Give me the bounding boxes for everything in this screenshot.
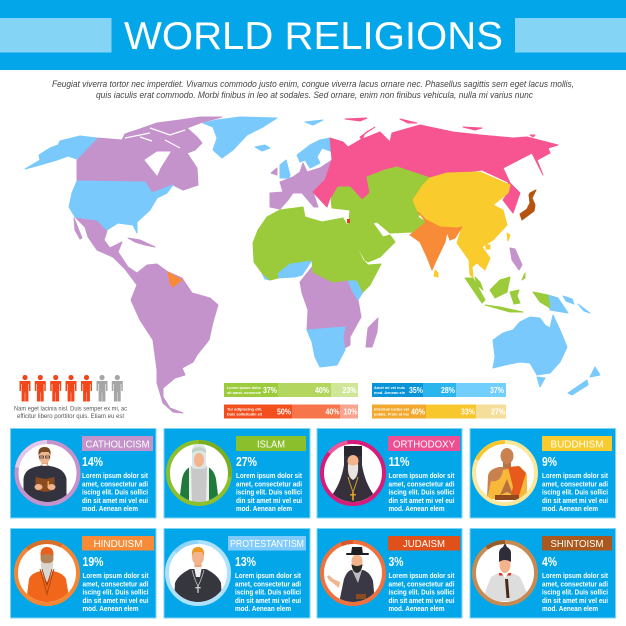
portrait: catholic priest (14, 440, 80, 506)
panel: shintoism (462, 528, 616, 618)
people pictogram (14, 375, 127, 420)
description: iscing elit. Duis sollici (388, 588, 454, 596)
description: mod. Aenean elem (236, 504, 292, 513)
header band (0, 0, 626, 70)
description: din sit amet mi vel eui (82, 496, 148, 505)
description: amet, consectetur adi (82, 580, 148, 588)
portrait: buddhist monk (472, 440, 538, 506)
portrait: imam (168, 442, 230, 504)
pictogram caption (14, 406, 127, 420)
description (388, 471, 455, 513)
description: Lorem ipsum dolor sit (82, 571, 149, 580)
label (542, 436, 612, 451)
stacked bar: yellow: 40% (411, 408, 425, 416)
stacked bar: yellow (372, 404, 506, 418)
description: amet, consectetur adi (388, 580, 454, 588)
stacked bar: blue: 35% (409, 386, 423, 395)
label: SHINTOISM (550, 538, 604, 550)
portrait: shinto priest (472, 540, 538, 606)
panel: islam (164, 428, 310, 518)
stacked bar: red (224, 404, 358, 418)
intro text: quis iaculis erat commodo. Morbi finibus in leo at sodales. Sed ornare, enim non finibus vehicula, nulla mi varius nunc (96, 90, 533, 100)
label: ORTHODOXY (393, 438, 455, 450)
region: orthodox pink (313, 118, 558, 213)
description: iscing elit. Duis sollici (542, 588, 608, 596)
stacked bar: green: 37% (263, 386, 277, 395)
region: hindu orange (168, 212, 462, 287)
portrait: orthodox priest (320, 440, 386, 506)
label: ISLAM (257, 438, 285, 450)
label (542, 536, 612, 550)
percentage: 3% (388, 554, 404, 569)
description: amet, consectetur adi (82, 480, 148, 488)
description: Lorem ipsum dolor sit (388, 571, 455, 580)
description (82, 571, 149, 613)
description: iscing elit. Duis sollici (235, 588, 301, 596)
pictogram caption: Nam eget lacinia nisl. Duis semper ex mi, ac (14, 406, 127, 412)
description: mod. Aenean elem (388, 604, 444, 613)
region: catholic purple (74, 117, 522, 413)
description: Lorem ipsum dolor sit (388, 471, 455, 480)
description: mod. Aenean elem (235, 604, 291, 613)
description (82, 471, 149, 513)
pictogram caption: efficitur libero porttitor quis. Etiam eu est (17, 414, 124, 420)
description: din sit amet mi vel eui (388, 596, 454, 605)
stacked bar: blue (372, 383, 506, 397)
region: israel (347, 219, 350, 223)
panel: hinduism (3, 528, 156, 618)
label: HINDUISM (94, 538, 142, 550)
portrait: rabbi (320, 540, 386, 606)
description: amet, consectetur adi (236, 480, 302, 488)
label: PROTESTANTISM (230, 538, 304, 550)
stacked bar: red: Duis sollicitudin sit (227, 412, 263, 416)
panel: buddhism (464, 428, 616, 518)
percentage: 4% (542, 554, 557, 569)
stacked bar: blue: mod. Aenean ele (374, 390, 406, 395)
stacked bar: red: 40% (326, 408, 340, 416)
description: din sit amet mi vel eui (82, 596, 148, 605)
intro text (52, 79, 574, 100)
description: Lorem ipsum dolor sit (82, 471, 149, 480)
percentage: 14% (82, 454, 103, 469)
percentage: 11% (388, 454, 410, 469)
description: iscing elit. Duis sollici (236, 488, 302, 496)
description: din sit amet mi vel eui (388, 496, 454, 505)
stacked bar: green: Lorem ipsum dolor (227, 385, 261, 390)
portrait: hindu sadhu (14, 540, 80, 606)
description: amet, consectetur adi (388, 480, 454, 488)
title: WORLD RELIGIONS (124, 15, 503, 58)
description: din sit amet mi vel eui (542, 496, 608, 505)
percentage: 27% (236, 454, 257, 469)
description: Lorem ipsum dolor sit (235, 571, 302, 580)
label (388, 536, 460, 550)
description: mod. Aenean elem (82, 504, 138, 513)
region: protestant blue (25, 117, 600, 395)
description: amet, consectetur adi (542, 580, 608, 588)
region: islam green (253, 167, 550, 312)
region: buddhist yellow (413, 172, 510, 277)
label: BUDDHISM (550, 438, 604, 450)
stacked bar: yellow: 33% (461, 408, 475, 416)
panel: judaism (313, 528, 462, 618)
description: din sit amet mi vel eui (235, 596, 301, 605)
description: mod. Aenean elem (388, 504, 444, 513)
description (236, 471, 303, 513)
description (235, 571, 302, 613)
red figures (20, 375, 92, 402)
stacked bar: blue: 37% (490, 386, 504, 395)
label: JUDAISM (403, 538, 445, 550)
intro text: Feugiat viverra tortor nec imperdiet. Vivamus commodo justo enim, congue viverra lacus ornare nec. Phasellus sagittis sem eget lacus mollis, (52, 79, 574, 89)
stacked bar: green: 23% (342, 386, 356, 395)
stacked bar: blue: 28% (441, 386, 455, 395)
percentage: 13% (235, 554, 256, 569)
canada: hudson bay and channels (125, 128, 185, 175)
description: amet, consectetur adi (542, 480, 608, 488)
description: din sit amet mi vel eui (236, 496, 302, 505)
region: shinto brown (520, 190, 536, 220)
percentage: 9% (542, 454, 557, 469)
description: din sit amet mi vel eui (542, 596, 608, 605)
label (236, 436, 306, 451)
description: iscing elit. Duis sollici (82, 588, 148, 596)
percentage: 19% (82, 554, 104, 569)
description: mod. Aenean elem (542, 504, 598, 513)
description: mod. Aenean elem (82, 604, 138, 613)
description (542, 571, 609, 613)
stacked bar: red: 50% (277, 408, 291, 416)
description: Lorem ipsum dolor sit (542, 571, 609, 580)
label: CATHOLICISM (86, 438, 150, 450)
stacked bar: green (224, 383, 358, 397)
panel: catholicism (10, 428, 156, 518)
stacked bar: yellow: putate. Proin at mo (374, 412, 410, 416)
world map (25, 117, 600, 413)
description (542, 471, 609, 513)
description: iscing elit. Duis sollici (82, 488, 148, 496)
grey figures (96, 375, 123, 402)
stacked bar: yellow: Interdum luctus vol (374, 406, 409, 412)
stacked bar: green: sit amet, consecte (227, 390, 262, 395)
label (82, 536, 154, 550)
panel: protestantism (154, 528, 310, 618)
description: iscing elit. Duis sollici (542, 488, 608, 496)
stacked bar: green: 40% (315, 386, 329, 395)
portrait: protestant pastor (165, 540, 231, 606)
description: amet, consectetur adi (235, 580, 301, 588)
description: Lorem ipsum dolor sit (236, 471, 303, 480)
stacked bar: red: 10% (344, 408, 358, 416)
description: Lorem ipsum dolor sit (542, 471, 609, 480)
description: iscing elit. Duis sollici (388, 488, 454, 496)
description (388, 571, 455, 613)
description: mod. Aenean elem (542, 604, 598, 613)
stacked bar: yellow: 27% (491, 408, 505, 416)
stacked bar: red: Tur adipiscing elit. (227, 406, 262, 412)
panel: orthodoxy (309, 428, 462, 518)
stacked bar: blue: Amet mi vel euis (374, 385, 405, 390)
